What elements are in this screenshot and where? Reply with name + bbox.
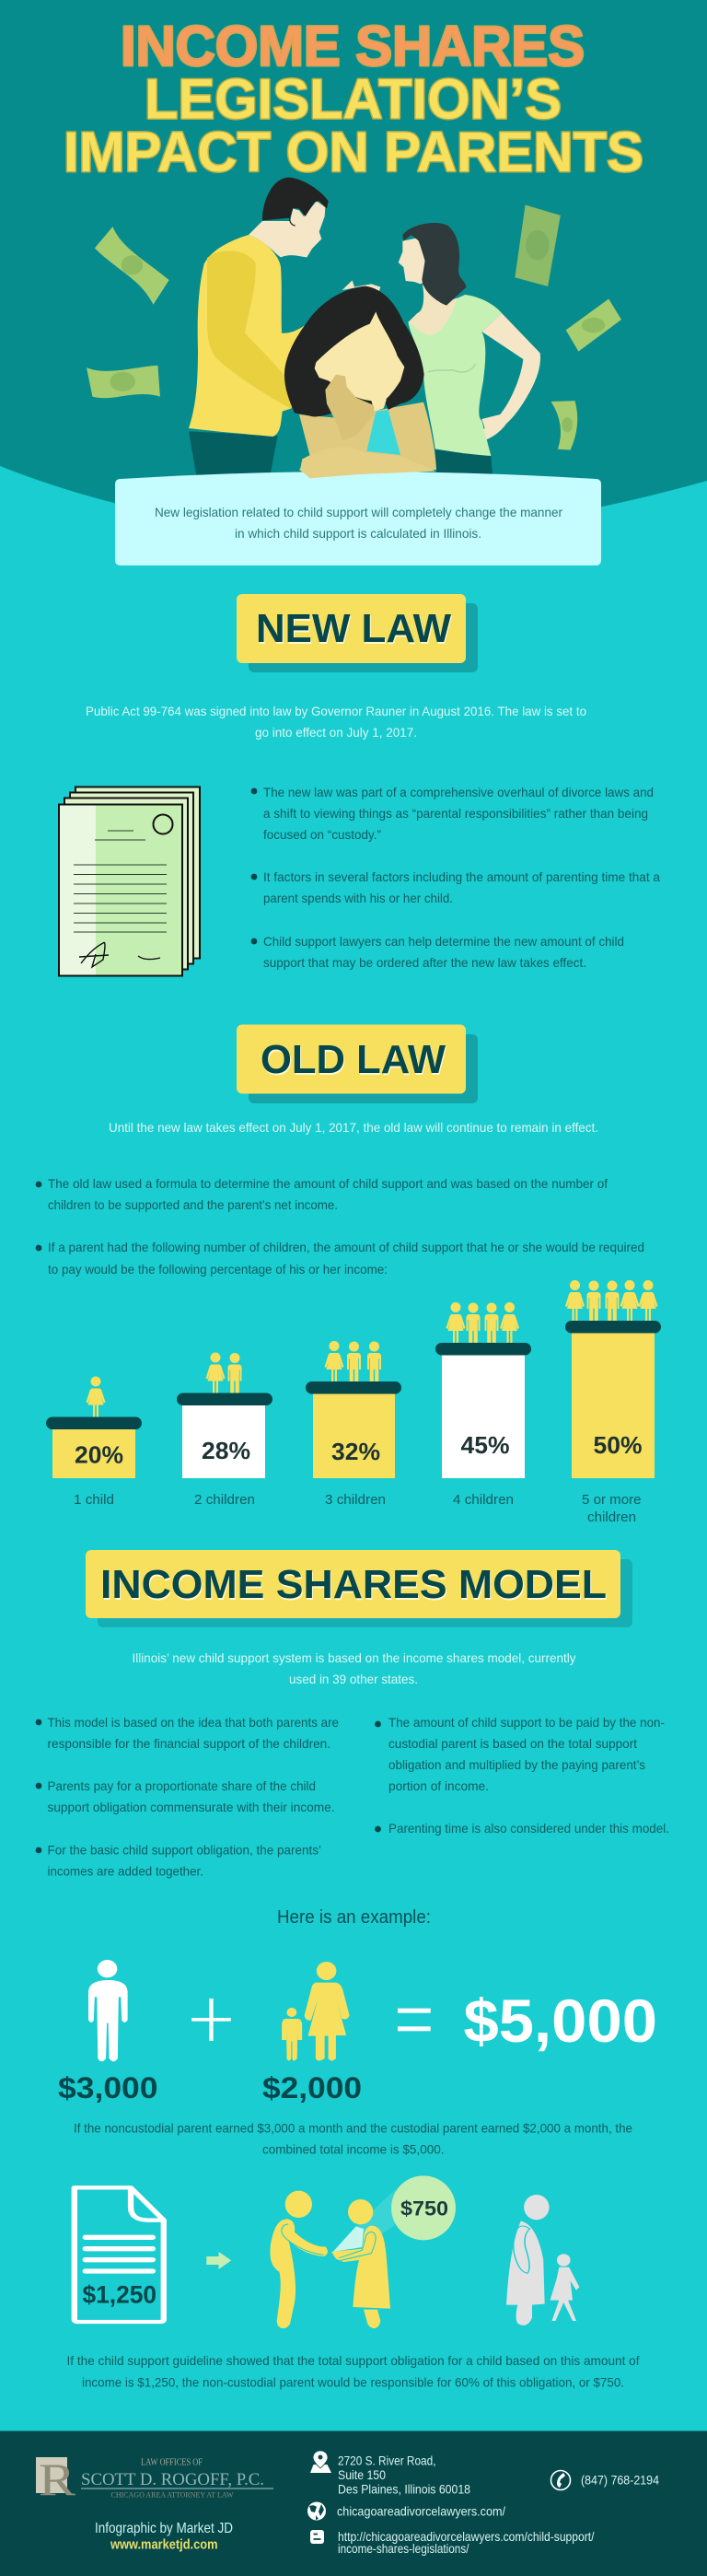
website link: chicagoareadivorcelawyers.com/ [337,2503,505,2518]
list: old law points: The old law used a formula to determine the amount of child support and was based on the number of [48,1176,608,1191]
bar: 4 children: 4 children [453,1492,514,1508]
list: model points left [36,1715,339,1879]
text block: new law intro: Public Act 99-764 was signed into law by Governor Rauner in August 2016. The law is set to [86,704,586,718]
icon: globe [307,2501,326,2520]
title [64,15,643,183]
heading: income shares model: INCOME SHARES MODEL [100,1562,607,1607]
icon: equals sign [398,2009,431,2031]
logo: law offices: LAW OFFICES OF [141,2457,203,2468]
list: old law points: If a parent had the following number of children, the amount of child support that he or she would be required [48,1240,644,1254]
text block: model intro [133,1650,576,1686]
logo: law offices: SCOTT D. ROGOFF, P.C. [81,2470,264,2489]
icon: location pin [310,2451,331,2473]
text block: combined income: combined total income is $5,000. [262,2142,444,2157]
credit: Infographic by Market JD [95,2521,233,2536]
list: new law points: a shift to viewing things as “parental responsibilities” rather than being [263,806,648,821]
blog link [338,2529,595,2556]
illustration: parent with child in grey [506,2195,579,2325]
bar: 1 child [46,1376,142,1508]
panel: new law [59,594,660,976]
heading: old law: OLD LAW [261,1037,446,1082]
icon: phone [551,2470,571,2490]
illustration: parents exchanging payment [270,2175,456,2328]
credit: www.marketjd.com [110,2536,217,2553]
icon: guideline document: $1,250 [83,2280,156,2308]
address: 2720 S. River Road, [338,2454,436,2468]
panel: income shares model [36,1550,669,1879]
text block: model intro: used in 39 other states. [289,1672,418,1686]
bar chart: support percentages [46,1280,661,1525]
text block: combined income: If the noncustodial parent earned $3,000 a month and the custodial parent earned $2,000 a month, the [74,2120,632,2135]
address [338,2454,470,2496]
logo: law offices: CHICAGO AREA ATTORNEY AT LAW [110,2490,234,2500]
list: new law points: focused on “custody.” [263,827,381,842]
bar: 3 children: 3 children [325,1492,386,1508]
panel: old law [36,1024,661,1525]
bar: 2 children: 28% [202,1437,250,1464]
text block: new law intro: go into effect on July 1, 2017. [255,725,417,740]
bar: 2 children: 2 children [194,1492,255,1508]
address: Suite 150 [338,2467,386,2482]
list: model points right: Parenting time is also considered under this model. [388,1821,669,1836]
list: model points right: The amount of child support to be paid by the non- [388,1715,665,1730]
heading: here is an example: Here is an example: [277,1907,431,1928]
bar: 5 or more children: children [587,1509,636,1525]
list: old law points: to pay would be the following percentage of his or her income: [48,1262,388,1276]
text block: new law intro [86,704,586,740]
title: LEGISLATION’S [145,68,562,131]
footer background [0,2431,707,2576]
text block: obligation example: If the child support guideline showed that the total support obligation for a child based on this amount of [66,2353,640,2368]
list: model points left: For the basic child support obligation, the parents’ [48,1842,321,1857]
logo: law offices: R [39,2454,76,2505]
bar: 5 or more children: 5 or more [582,1492,641,1508]
bar: 4 children: 45% [460,1431,510,1459]
list: model points right: portion of income. [388,1778,489,1793]
panel: hero [0,0,707,565]
text block: old law intro: Until the new law takes effect on July 1, 2017, the old law will continue to remain in effect. [109,1120,598,1135]
heading: new law [237,594,478,672]
bar: 5 or more children: 50% [593,1431,643,1459]
list: model points left: responsible for the financial support of the children. [48,1736,330,1751]
list: old law points [36,1176,644,1276]
list: new law points: It factors in several factors including the amount of parenting time that a [263,869,660,884]
text block: obligation example [66,2353,640,2389]
text block: obligation example: income is $1,250, the non-custodial parent would be responsible for 60% of this obligation, or $750. [82,2374,624,2389]
bar: 5 or more children [565,1280,661,1525]
bar: 2 children [177,1352,272,1508]
icon: document stack [59,787,200,976]
illustration: parents exchanging payment: $750 [400,2197,448,2220]
panel: worked example [58,1907,657,2389]
list: new law points: support that may be ordered after the new law takes effect. [263,955,586,970]
hero dark background [0,0,707,534]
title: INCOME SHARES [121,15,585,77]
text box: intro [115,472,601,565]
text box: intro: in which child support is calculated in Illinois. [235,526,481,541]
text box: intro: New legislation related to child support will completely change the manner [155,505,562,519]
amount: non-custodial income: $3,000 [58,2071,158,2104]
list: model points right [375,1715,669,1836]
text block: combined income [74,2120,632,2157]
icon: plus sign [191,1999,231,2041]
panel: footer [0,2431,707,2576]
list: new law points: Child support lawyers can help determine the new amount of child [263,934,624,949]
credit [95,2521,233,2553]
heading: new law: NEW LAW [256,606,451,651]
bar: 1 child: 20% [75,1440,123,1468]
list: old law points: children to be supported and the parent’s net income. [48,1197,338,1212]
heading: old law [237,1024,478,1103]
text block: model intro: Illinois’ new child support system is based on the income shares model, currently [133,1650,576,1665]
blog link: http://chicagoareadivorcelawyers.com/child-support/ [338,2529,595,2544]
illustration: daughter [284,286,436,478]
blog link: income-shares-legislations/ [338,2541,469,2556]
icon: guideline document [75,2187,164,2322]
bar: 3 children [306,1341,401,1508]
list: new law points [251,785,660,970]
heading: income shares model [86,1550,632,1627]
total income: $5,000 [464,1987,657,2055]
logo: law offices [36,2454,273,2505]
bar: 1 child: 1 child [74,1492,114,1508]
arrow [206,2252,231,2269]
list: new law points: The new law was part of a comprehensive overhaul of divorce laws and [263,785,654,799]
title: IMPACT ON PARENTS [64,121,643,183]
bar: 3 children: 32% [331,1438,380,1465]
icon: custodial parent and child [282,1962,350,2060]
illustration: father and mother [189,178,540,476]
address: Des Plaines, Illinois 60018 [338,2481,470,2496]
phone number: (847) 768-2194 [581,2472,659,2487]
amount: custodial income: $2,000 [262,2071,362,2104]
list: model points left: This model is based on the idea that both parents are [48,1715,339,1730]
icon: blog [310,2530,324,2544]
list: new law points: parent spends with his or her child. [263,891,453,905]
icon: flying money [87,204,621,450]
bar: 4 children [435,1302,531,1508]
list: model points left: Parents pay for a proportionate share of the child [48,1778,316,1793]
list: model points right: obligation and multiplied by the paying parent’s [388,1757,645,1772]
list: model points left: support obligation commensurate with their income. [48,1800,335,1814]
list: model points right: custodial parent is based on the total support [388,1736,637,1751]
list: model points left: incomes are added together. [48,1864,203,1879]
icon: non-custodial parent [88,1960,128,2061]
